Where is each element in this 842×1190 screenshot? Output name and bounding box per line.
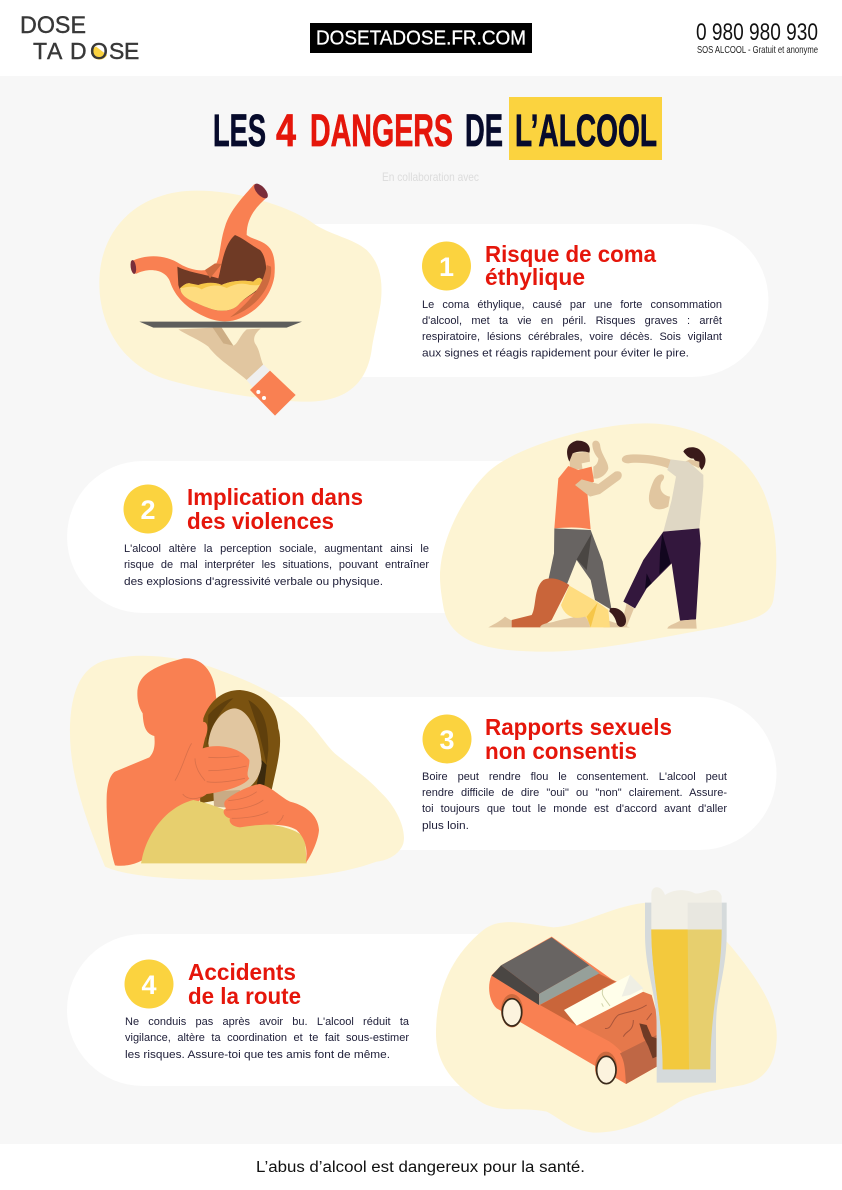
text block 3: toi toujours que tout le monde est d'accord avant d'aller xyxy=(422,803,727,815)
website badge: DOSETADOSE.FR.COM xyxy=(316,28,526,50)
heading 2: Implication dans xyxy=(187,484,363,510)
text block 1: d'alcool, met ta vie en péril. Risques graves : arrêt xyxy=(422,315,722,327)
header bar xyxy=(0,0,842,76)
heading 1: Risque de coma xyxy=(485,241,656,267)
text block 3: Boire peut rendre flou le consentement. L'alcool peut xyxy=(422,771,727,783)
title: DE xyxy=(465,105,503,156)
title: 4 xyxy=(276,105,296,156)
heading 3: non consentis xyxy=(485,738,637,764)
logo xyxy=(20,12,139,64)
logo: DOSE xyxy=(20,12,86,39)
illustration: fight xyxy=(440,423,776,652)
illustration: stomach on a tray xyxy=(99,181,382,416)
number badge 2: 2 xyxy=(140,495,156,525)
number badge 3: 3 xyxy=(439,725,455,755)
panel 1: coma xyxy=(99,181,768,416)
website badge xyxy=(310,23,532,53)
number badge 4 xyxy=(124,960,174,1008)
title xyxy=(213,97,662,160)
heading 2 xyxy=(187,484,363,534)
illustration: crashed car and beer xyxy=(436,887,777,1133)
text block 1 xyxy=(422,297,722,360)
text block 4 xyxy=(125,1014,409,1061)
panel 3: non-consensual xyxy=(70,656,777,880)
number badge 3 xyxy=(422,714,472,764)
text block 2: des explosions d'agressivité verbale ou physique. xyxy=(124,576,383,588)
text block 3: plus loin. xyxy=(422,820,469,832)
text block 4: vigilance, altère ta coordination et te fait sous-estimer xyxy=(125,1032,409,1044)
heading 4: de la route xyxy=(188,983,301,1009)
text block 2 xyxy=(124,541,429,588)
text block 4: Ne conduis pas après avoir bu. L'alcool réduit ta xyxy=(125,1016,409,1028)
panel 4: road accidents xyxy=(67,887,777,1133)
title: DANGERS xyxy=(310,105,453,156)
number badge 1 xyxy=(422,242,471,290)
number badge 2 xyxy=(124,484,172,534)
heading 4: Accidents xyxy=(188,959,296,985)
number badge 4: 4 xyxy=(141,970,157,1000)
heading 3 xyxy=(485,714,672,764)
card background 4 xyxy=(67,934,520,1086)
logo: TA DOSE xyxy=(33,38,139,64)
title: LES xyxy=(213,105,266,156)
card background 1 xyxy=(300,224,768,377)
heading 2: des violences xyxy=(187,508,334,534)
footer xyxy=(0,1144,842,1190)
illustration: hand over mouth xyxy=(70,656,404,880)
number badge 1: 1 xyxy=(439,252,454,282)
footer: L’abus d’alcool est dangereux pour la santé. xyxy=(256,1159,585,1176)
card background 2 xyxy=(67,461,520,613)
collaboration note: En collaboration avec xyxy=(382,170,479,184)
heading 4 xyxy=(188,959,301,1009)
title: L’ALCOOL xyxy=(515,105,657,156)
text block 2: risque de mal interpréter les situations, pouvant entraîner xyxy=(124,559,429,571)
text block 4: les risques. Assure-toi que tes amis font de même. xyxy=(125,1049,390,1061)
helpline xyxy=(696,19,818,56)
text block 1: aux signes et réagis rapidement pour éviter le pire. xyxy=(422,348,689,360)
text block 1: respiratoire, lésions cérébrales, voire décès. Sois vigilant xyxy=(422,331,722,343)
heading 1 xyxy=(485,241,656,290)
card background 3 xyxy=(250,697,776,850)
panel 2: violence xyxy=(67,423,776,652)
text block 3: rendre difficile de dire "oui" ou "non" clairement. Assure- xyxy=(422,787,727,799)
heading 1: éthylique xyxy=(485,264,585,290)
text block 2: L'alcool altère la perception sociale, augmentant ainsi le xyxy=(124,543,429,555)
text block 1: Le coma éthylique, causé par une forte consommation xyxy=(422,299,722,311)
text block 3 xyxy=(422,769,727,832)
heading 3: Rapports sexuels xyxy=(485,714,672,740)
